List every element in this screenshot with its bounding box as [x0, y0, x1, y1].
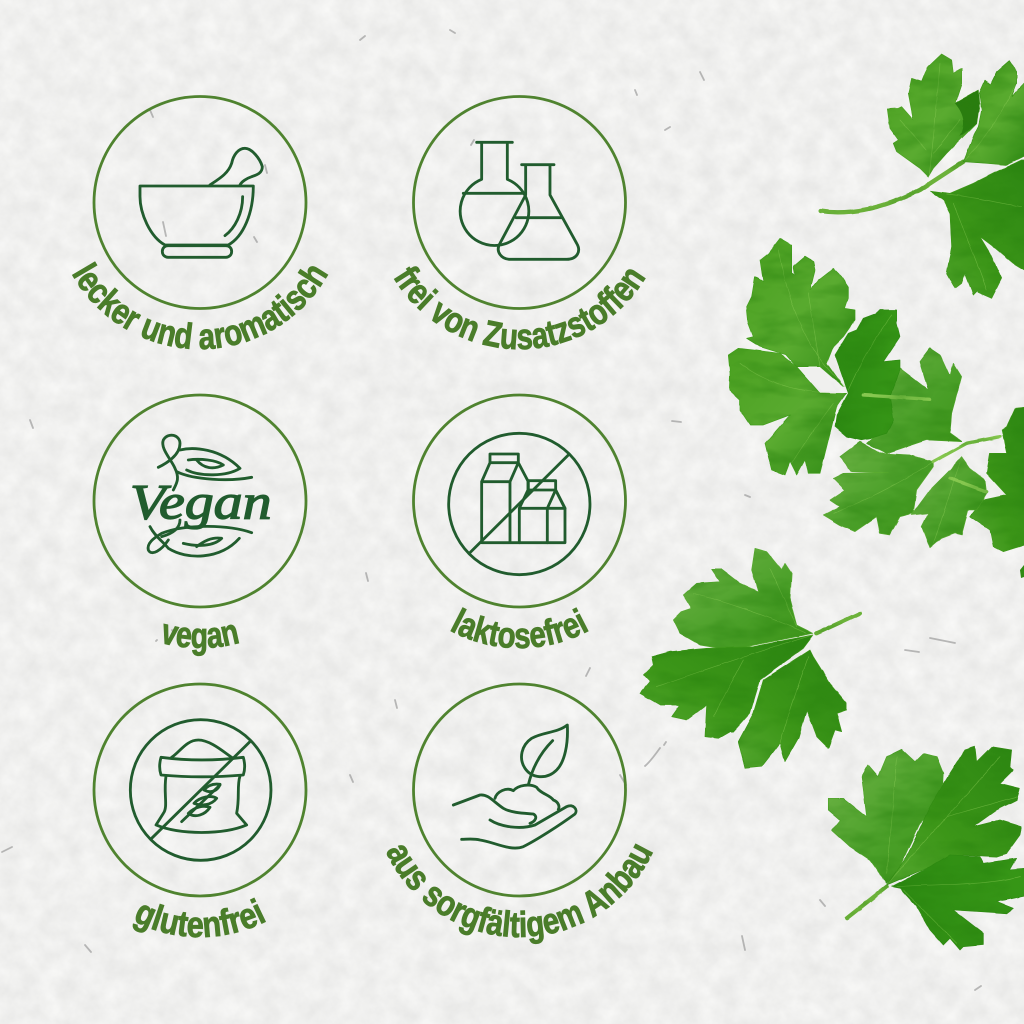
badge ring: [414, 395, 626, 607]
label: aus sorgfältigem Anbau: [386, 843, 654, 944]
badge ring: [94, 96, 306, 308]
leaflet: [673, 548, 813, 650]
logo wordmark: Vegan: [130, 473, 272, 529]
leaflet: [930, 160, 1024, 298]
leaflet: [970, 407, 1024, 552]
leaflet: [728, 348, 847, 475]
badge ring: [414, 684, 626, 896]
leaflet: [835, 310, 900, 440]
badge: laktosefrei: [412, 394, 627, 649]
stem: [847, 887, 887, 918]
leaflet: [887, 747, 1022, 885]
leaflet: [738, 650, 847, 768]
badge: aus sorgfaeltigem Anbau: [386, 682, 654, 944]
veins: [657, 568, 813, 743]
leaflet: [640, 635, 813, 738]
leaflet: [828, 749, 943, 883]
leaflet: [963, 61, 1024, 165]
leaflet: [887, 54, 979, 177]
icon: mortar and pestle: [140, 148, 262, 257]
parsley leaf: bottom right: [828, 747, 1024, 950]
icon: crossed flour sack: [130, 720, 271, 860]
parsley sprig: top right: [821, 54, 1024, 298]
icon: vegan script logo: [130, 435, 272, 556]
stems: [863, 395, 1000, 492]
badge ring: [414, 96, 626, 308]
parsley leaf: center left: [640, 548, 860, 768]
stem: [817, 613, 860, 633]
badge ring: [94, 395, 306, 607]
label: lecker und aromatisch: [72, 261, 328, 350]
badge: frei von Zusatzstoffen: [394, 95, 646, 350]
leaflet shadow: [955, 90, 979, 137]
icon: hand holding seedling: [453, 725, 576, 848]
leaflet: [867, 348, 962, 453]
label: vegan: [163, 624, 240, 656]
script swirls: [148, 435, 252, 556]
leaflet: [823, 442, 933, 535]
veins: [900, 63, 1022, 290]
badge: glutenfrei: [92, 682, 308, 938]
parsley sprig: middle: [728, 238, 1024, 552]
veins: [740, 250, 960, 543]
label: laktosefrei: [450, 607, 589, 649]
parsley tip at right edge: [1020, 565, 1024, 578]
gap between middle leaflets: [798, 368, 837, 391]
veins: [887, 757, 1020, 943]
icon: lab flasks: [460, 142, 579, 259]
label: glutenfrei: [132, 898, 266, 938]
icon: crossed milk cartons: [449, 433, 590, 575]
badge: vegan: [92, 394, 308, 656]
badge: lecker und aromatisch: [72, 95, 328, 350]
leaflet: [747, 238, 855, 387]
badge ring: [94, 684, 306, 896]
stem: [821, 162, 963, 212]
leaflet: [892, 855, 1024, 950]
leaflet: [912, 457, 987, 548]
label: frei von Zusatzstoffen: [394, 266, 646, 350]
